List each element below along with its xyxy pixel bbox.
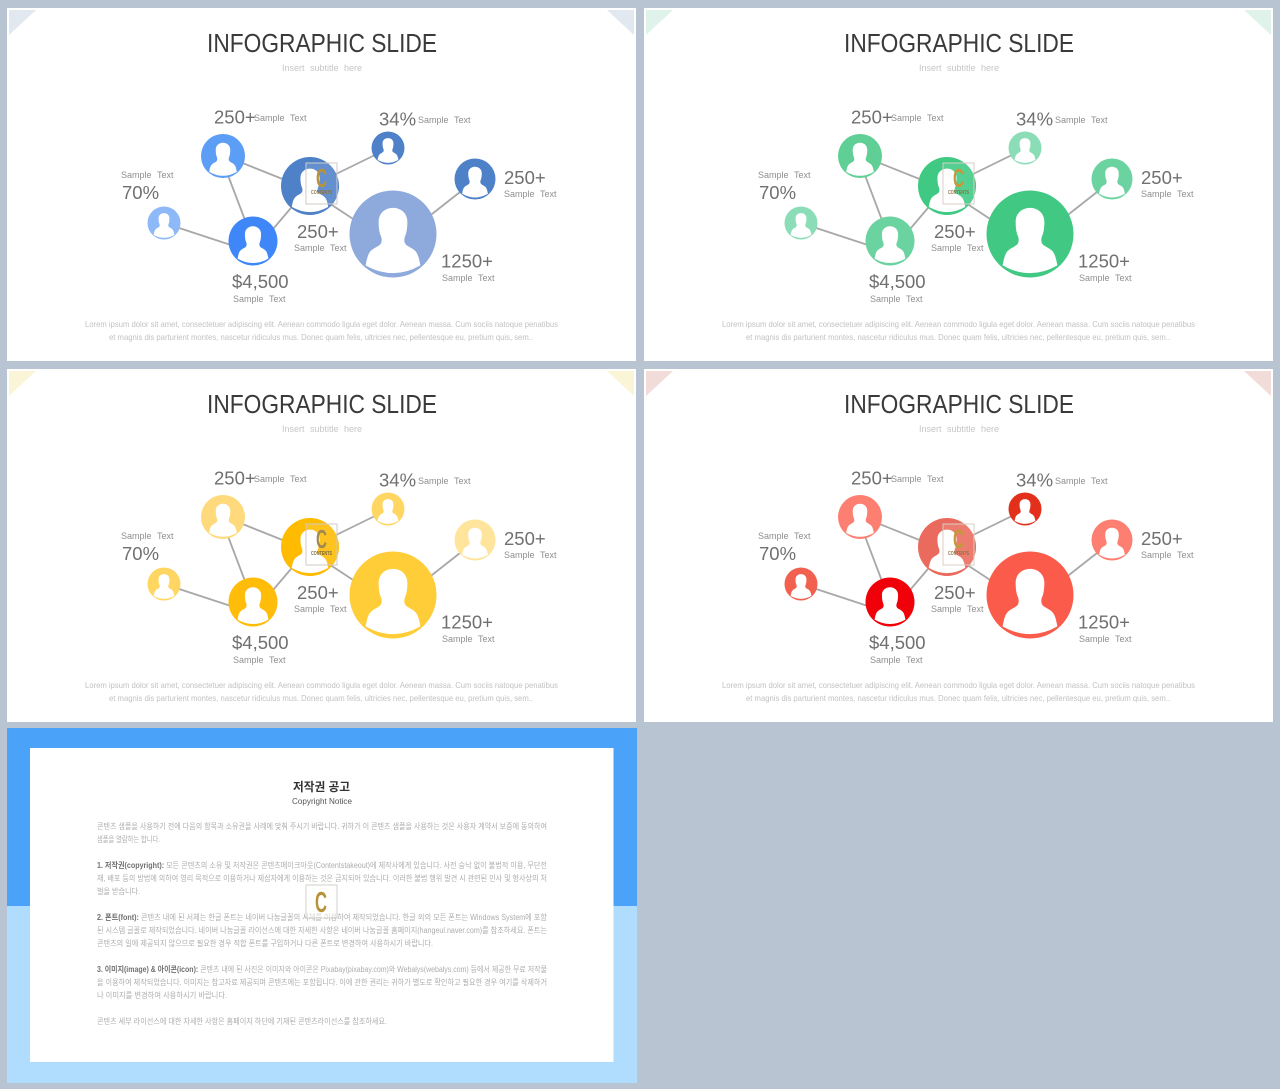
data labels: $4,500	[232, 271, 289, 292]
icon: corner triangle right	[1244, 371, 1271, 396]
notice section 2	[97, 912, 548, 948]
body text	[722, 319, 1195, 342]
body text	[85, 680, 558, 703]
data labels: $4,500	[232, 632, 289, 653]
notice subheading: Copyright Notice	[292, 796, 352, 806]
watermark	[943, 524, 974, 565]
panel: red slide	[644, 369, 1273, 722]
data labels: 1250+	[1078, 612, 1130, 632]
title: INFOGRAPHIC SLIDE	[844, 28, 1074, 58]
node: centre	[918, 157, 976, 215]
data labels: 70%	[122, 182, 159, 203]
node: centre	[918, 518, 976, 576]
data labels: 34%	[1016, 108, 1053, 130]
data labels: Sample Text	[442, 634, 495, 644]
node: left small	[148, 206, 180, 240]
data labels: 250+	[934, 582, 976, 603]
data labels: Sample Text	[121, 170, 174, 180]
node: left small	[784, 568, 818, 600]
data labels: Sample Text	[233, 655, 286, 665]
data labels: Sample Text	[442, 273, 495, 283]
data labels: Sample Text	[233, 294, 286, 304]
data labels: 250+	[851, 468, 893, 488]
data labels: 250+	[851, 106, 893, 128]
watermark: C	[315, 887, 327, 919]
watermark: C	[316, 163, 327, 193]
body text	[85, 319, 558, 342]
data labels: Sample Text	[294, 604, 347, 614]
body text: Lorem ipsum dolor sit amet, consectetuer adipiscing elit. Aenean commodo ligula eget dolor. Aenean massa. Cum sociis natoque penatibus	[85, 319, 558, 329]
title: INFOGRAPHIC SLIDE	[207, 389, 437, 419]
data labels: Sample Text	[870, 294, 923, 304]
data labels: 34%	[379, 108, 416, 130]
data labels: 1250+	[1078, 250, 1130, 272]
notice section 3	[97, 964, 547, 1000]
node: centre	[281, 157, 339, 215]
data labels: Sample Text	[1055, 115, 1108, 125]
data labels: 70%	[759, 182, 796, 203]
title: INFOGRAPHIC SLIDE	[844, 389, 1074, 419]
data labels: Sample Text	[1141, 189, 1194, 199]
data labels: Sample Text	[418, 476, 471, 486]
data labels: Sample Text	[294, 243, 347, 253]
data labels: 250+	[504, 167, 546, 188]
notice section 2: 된 시스템 글꼴로 제작되었습니다. 네이버 나눔글꼴 라이선스에 대한 자세한 사항은 네이버 나눔글꼴 홈페이지(hangeul.naver.com)를 참조하세요. 폰트는	[97, 925, 547, 935]
notice closing line: 콘텐츠 세부 라이선스에 대한 자세한 사항은 홈페이지 하단에 기재된 콘텐츠라이선스를 참조하세요.	[97, 1016, 387, 1026]
data labels: 250+	[214, 106, 256, 128]
data labels: 70%	[759, 543, 796, 564]
body text: et magnis dis parturient montes, nascetur ridiculus mus. Donec quam felis, ultricies nec, pellentesque eu, pretium quis, sem..	[746, 693, 1170, 703]
notice section 1: 1. 저작권(copyright): 모든 콘텐츠의 소유 및 저작권은 콘텐츠메이크아웃(Contentstakeout)에 제작사에게 있습니다. 사전 승낙 없이 불법적 이용, 무단전	[97, 860, 547, 870]
network connector lines	[807, 514, 1104, 609]
node: left small	[148, 568, 180, 600]
panel: blue slide	[7, 8, 636, 361]
node: large	[350, 190, 436, 278]
data labels: Sample Text	[1079, 273, 1132, 283]
data labels: Sample Text	[758, 170, 811, 180]
data labels: 250+	[214, 468, 256, 488]
icon: corner triangle right	[1244, 10, 1271, 35]
notice section 1	[97, 860, 547, 896]
data labels: 250+	[297, 582, 339, 603]
watermark	[306, 524, 337, 565]
node: right	[454, 520, 496, 560]
data labels: 1250+	[441, 612, 493, 632]
panel: yellow slide	[7, 369, 636, 722]
watermark	[306, 885, 337, 919]
watermark: C	[953, 163, 964, 193]
data labels	[758, 106, 1194, 304]
data labels: Sample Text	[1055, 476, 1108, 486]
node: right	[1092, 520, 1132, 560]
node: bottom	[228, 216, 278, 266]
notice section 1: 벌을 받습니다.	[97, 886, 140, 896]
title: INFOGRAPHIC SLIDE	[207, 28, 437, 58]
icon: corner triangle left	[646, 10, 673, 35]
subtitle: Insert subtitle here	[919, 424, 999, 434]
notice section 3: 3. 이미지(image) & 아이콘(icon): 콘텐츠 내에 된 사진은 이미지와 아이콘은 Pixabay(pixabay.com)와 Webalys(webalys.com) 등에서 제공한 무료 저작물	[97, 964, 547, 974]
node: top left	[201, 134, 245, 178]
data labels: Sample Text	[418, 115, 471, 125]
watermark: CONTENTS	[311, 190, 332, 196]
data labels: 70%	[122, 543, 159, 564]
body text: et magnis dis parturient montes, nascetur ridiculus mus. Donec quam felis, ultricies nec, pellentesque eu, pretium quis, sem..	[109, 693, 533, 703]
notice section 2: 콘텐츠의 일에 제공되지 않으므로 필요한 경우 적합 폰트를 구입하거나 다른 폰트로 변경하여 사용하시기 바랍니다.	[97, 938, 433, 948]
node: large	[986, 552, 1074, 638]
subtitle: Insert subtitle here	[919, 63, 999, 73]
network connector lines	[170, 152, 467, 248]
icon: corner triangle left	[646, 371, 673, 396]
icon: corner triangle right	[607, 371, 634, 396]
node: top right small	[1008, 132, 1042, 164]
notice section 3: 을 이용하여 제작되었습니다. 이미지는 참고자료 제공되며 콘텐츠에는 포함됩니다. 이에 관한 권리는 귀하가 별도로 확인하고 필요한 경우 여기를 삭제하거	[97, 977, 547, 987]
data labels: 250+	[504, 528, 546, 549]
body text	[722, 680, 1195, 703]
node: top right small	[372, 132, 404, 164]
data labels: 250+	[297, 221, 339, 242]
watermark: CONTENTS	[311, 551, 332, 557]
data labels: Sample Text	[891, 113, 944, 123]
node: bottom	[866, 578, 914, 626]
body text: et magnis dis parturient montes, nascetur ridiculus mus. Donec quam felis, ultricies nec, pellentesque eu, pretium quis, sem..	[109, 332, 533, 342]
watermark: CONTENTS	[948, 190, 969, 196]
data labels: $4,500	[869, 632, 926, 653]
watermark: CONTENTS	[948, 551, 969, 557]
notice intro: 콘텐츠 샘플을 사용하기 전에 다음의 항목과 소유권을 사례에 맞춰 주시기 바랍니다. 귀하가 이 콘텐츠 샘플을 사용하는 것은 사용자 계약서 보증에 동의하여	[97, 821, 547, 831]
data labels: Sample Text	[504, 189, 557, 199]
notice section 1: 재, 배포 등의 방법에 의하여 영리 목적으로 이용하거나 제삼자에게 이용하는 것은 금지되어 있습니다. 이러한 불법 행위 발견 시 관련된 민사 및 형사상의 처	[97, 873, 547, 883]
node: top left	[838, 134, 882, 178]
node: bottom	[228, 578, 278, 626]
notice intro	[97, 821, 547, 844]
node: right	[454, 158, 496, 200]
data labels: 1250+	[441, 250, 493, 272]
data labels	[121, 468, 557, 665]
node: top left	[201, 495, 245, 539]
body text: Lorem ipsum dolor sit amet, consectetuer adipiscing elit. Aenean commodo ligula eget dolor. Aenean massa. Cum sociis natoque penatibus	[85, 680, 558, 690]
data labels: Sample Text	[758, 531, 811, 541]
node: large	[350, 552, 436, 638]
data labels: 250+	[1141, 167, 1183, 188]
icon: corner triangle left	[9, 10, 36, 35]
data labels: Sample Text	[870, 655, 923, 665]
node: bottom	[866, 216, 914, 266]
node: right	[1092, 158, 1132, 200]
notice section 2: 2. 폰트(font): 콘텐츠 내에 된 서체는 한글 폰트는 네이버 나눔글꼴의 서체를 이용하여 제작되었습니다. 한글 외의 모든 폰트는 Windows System에 포함	[97, 912, 548, 922]
watermark: C	[316, 524, 327, 554]
data labels: Sample Text	[254, 113, 307, 123]
node: centre	[281, 518, 339, 576]
data labels: Sample Text	[121, 531, 174, 541]
data labels: $4,500	[869, 271, 926, 292]
network connector lines	[807, 152, 1104, 248]
node: top right small	[1008, 492, 1042, 526]
watermark	[943, 163, 974, 204]
data labels: Sample Text	[254, 474, 307, 484]
body text: Lorem ipsum dolor sit amet, consectetuer adipiscing elit. Aenean commodo ligula eget dolor. Aenean massa. Cum sociis natoque penatibus	[722, 680, 1195, 690]
data labels: 250+	[934, 221, 976, 242]
node: top left	[838, 495, 882, 539]
data labels: Sample Text	[891, 474, 944, 484]
data labels: Sample Text	[1141, 550, 1194, 560]
subtitle: Insert subtitle here	[282, 63, 362, 73]
data labels: 34%	[379, 470, 416, 490]
data labels: 250+	[1141, 528, 1183, 549]
icon: corner triangle left	[9, 371, 36, 396]
data labels: 34%	[1016, 470, 1053, 490]
data labels	[758, 468, 1194, 665]
body text: Lorem ipsum dolor sit amet, consectetuer adipiscing elit. Aenean commodo ligula eget dolor. Aenean massa. Cum sociis natoque penatibus	[722, 319, 1195, 329]
network connector lines	[170, 514, 467, 609]
node: left small	[784, 206, 818, 240]
icon: corner triangle right	[607, 10, 634, 35]
body text: et magnis dis parturient montes, nascetur ridiculus mus. Donec quam felis, ultricies nec, pellentesque eu, pretium quis, sem..	[746, 332, 1170, 342]
panel: green slide	[644, 8, 1273, 361]
watermark	[306, 163, 337, 204]
watermark: C	[953, 524, 964, 554]
data labels: Sample Text	[504, 550, 557, 560]
data labels: Sample Text	[931, 243, 984, 253]
subtitle: Insert subtitle here	[282, 424, 362, 434]
node: large	[986, 190, 1074, 278]
notice section 3: 나 이미지를 변경하여 사용하시기 바랍니다.	[97, 990, 227, 1000]
notice heading: 저작권 공고	[293, 779, 350, 794]
data labels: Sample Text	[1079, 634, 1132, 644]
node: top right small	[372, 492, 404, 526]
notice intro: 샘플을 열람하는 합니다.	[97, 834, 160, 844]
data labels: Sample Text	[931, 604, 984, 614]
panel: copyright notice	[7, 728, 637, 1083]
data labels	[121, 106, 557, 304]
